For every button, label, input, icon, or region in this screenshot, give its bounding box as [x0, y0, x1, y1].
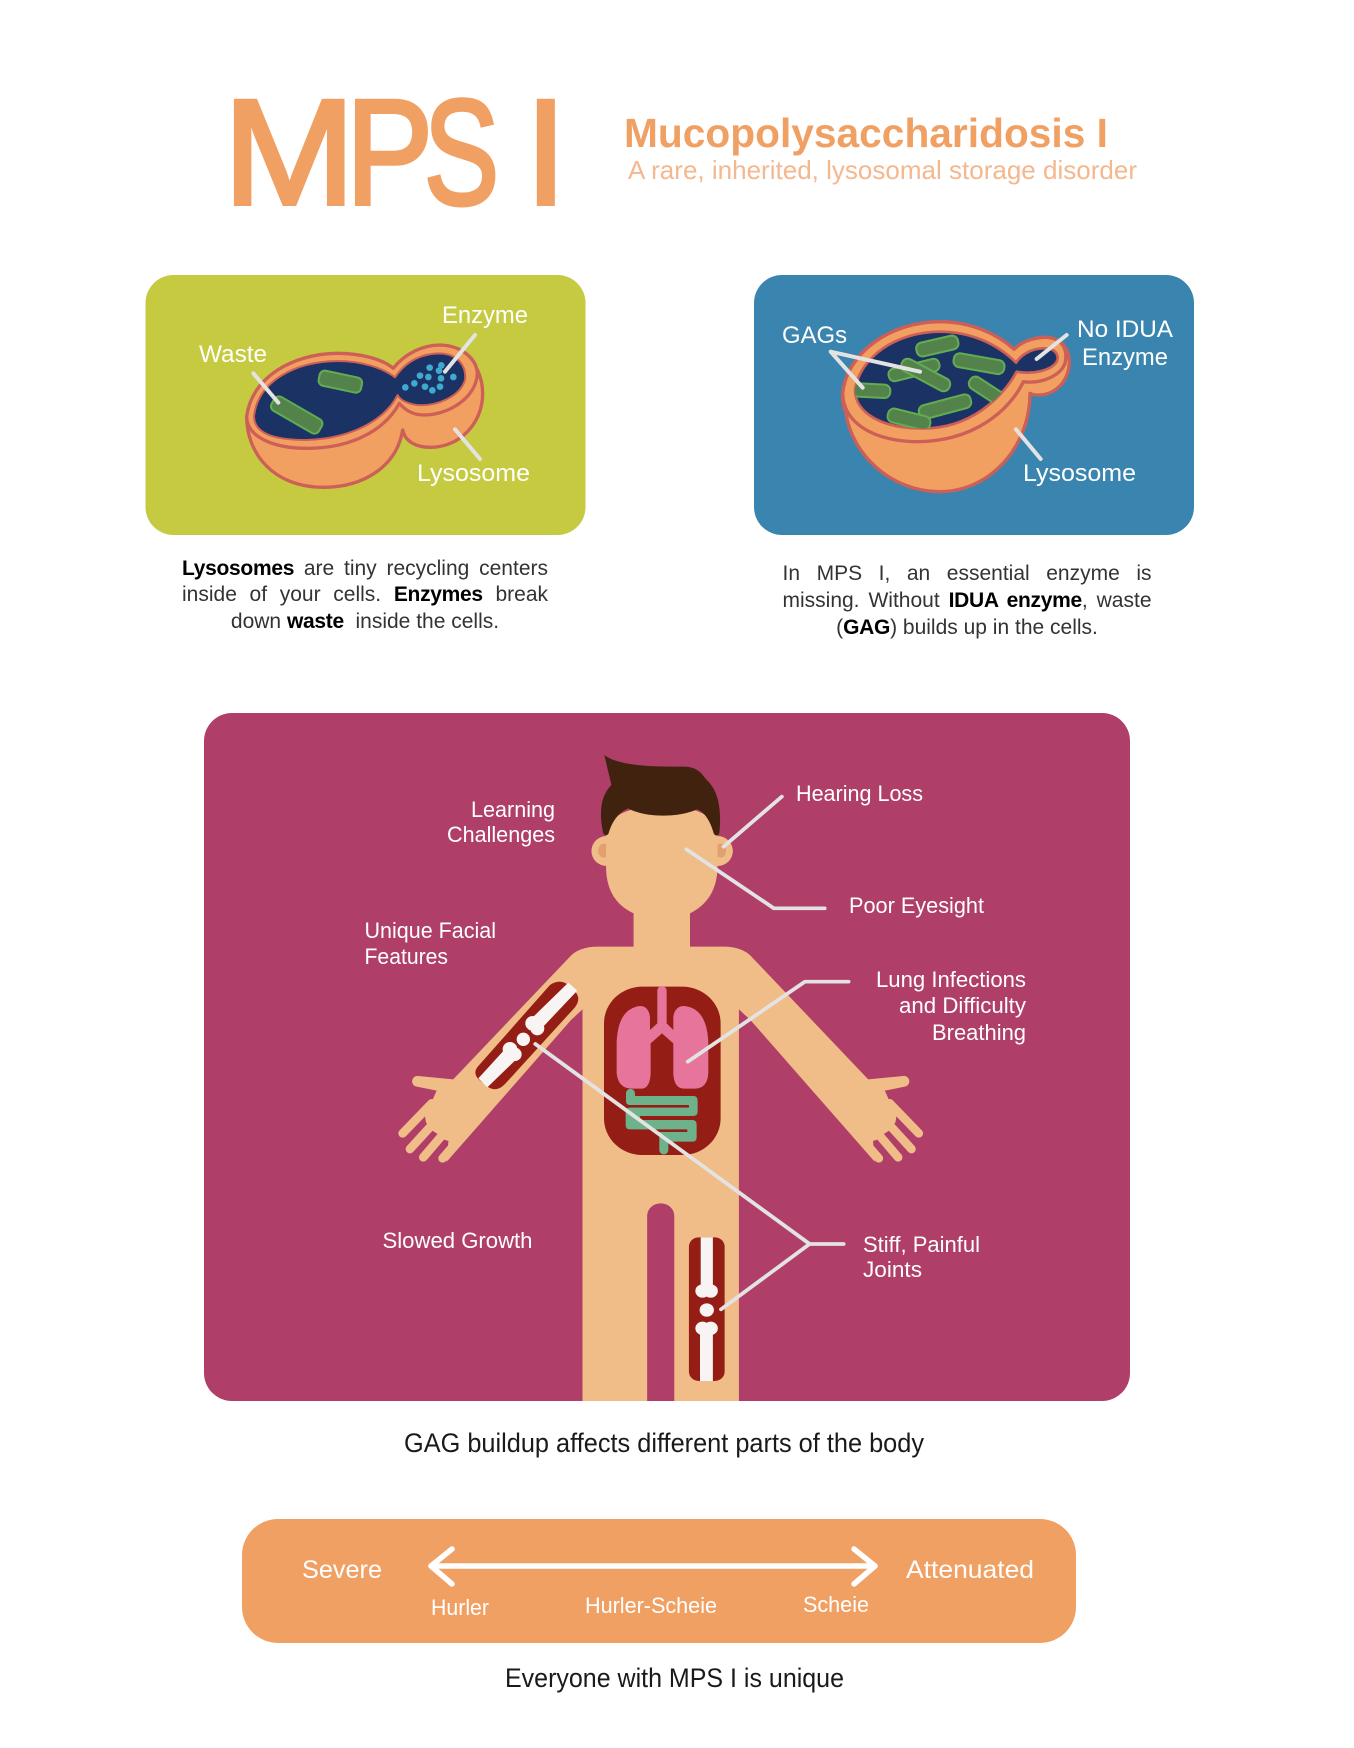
label: Unique Facial Features [364, 918, 496, 969]
label: Lung Infections and Difficulty Breathing: Breathing [932, 1020, 1026, 1045]
label: Hearing Loss: Hearing Loss [796, 781, 923, 806]
organs: chest cavity [604, 987, 721, 1155]
illustration: lysosome with enzyme [247, 335, 483, 487]
label: No IDUA Enzyme: Enzyme [1082, 344, 1168, 371]
tagline: A rare, inherited, lysosomal storage disorder [628, 155, 1137, 185]
text block: what goes wrong in MPS I: (GAG) builds up in the cells. [836, 616, 1098, 639]
title: MPS I: M [223, 68, 355, 236]
label: Hurler: Hurler [431, 1595, 489, 1620]
subtitle: full disease name: Mucopolysaccharidosis I [624, 110, 1108, 156]
panel background: magenta [204, 713, 1130, 1401]
label: Lysosome: Lysosome [1023, 460, 1136, 487]
panel: body effects [204, 713, 1130, 1401]
label: Attenuated: Attenuated [906, 1556, 1034, 1584]
label: No IDUA Enzyme: No IDUA [1077, 316, 1173, 343]
panel: MPS I lysosome [754, 275, 1194, 535]
leg: bone and joint [689, 1237, 725, 1381]
label: Lysosome: Lysosome [417, 460, 530, 487]
label: Slowed Growth: Slowed Growth [382, 1228, 532, 1253]
panel: severity spectrum [242, 1519, 1076, 1643]
illustration: human figure [403, 755, 919, 1401]
label: Scheie: Scheie [803, 1592, 869, 1617]
label: Unique Facial Features: Unique Facial [364, 918, 496, 943]
label: Lung Infections and Difficulty Breathing [876, 967, 1026, 1045]
title: MPS I: P [346, 68, 433, 236]
text block: what lysosomes do: inside of your cells. Enzymes break [182, 583, 548, 606]
label: Unique Facial Features: Features [364, 944, 448, 969]
caption: body effects: GAG buildup affects different parts of the body [404, 1428, 924, 1458]
arm: bone and joint [475, 982, 578, 1089]
panel: healthy lysosome [146, 275, 586, 535]
arrow: double headed [431, 1549, 875, 1584]
title: MPS I: S [424, 68, 499, 236]
label: Learning Challenges [447, 797, 555, 847]
illustration: lysosome full of GAGs [831, 322, 1069, 492]
label: Waste: Waste [199, 341, 267, 368]
label: Learning Challenges: Learning [471, 797, 555, 822]
label: Stiff, Painful Joints: Joints [863, 1257, 922, 1282]
panel background: orange [242, 1519, 1076, 1643]
caption: everyone is unique: Everyone with MPS I is unique [505, 1663, 844, 1693]
organs: intestines [626, 1089, 698, 1154]
label: Learning Challenges: Challenges [447, 822, 555, 847]
label: Severe: Severe [302, 1556, 382, 1584]
callout lines [535, 797, 849, 1309]
label: Stiff, Painful Joints [863, 1232, 980, 1282]
title: MPS I [223, 68, 567, 236]
text block: what lysosomes do [182, 557, 548, 633]
panel background: blue [754, 275, 1194, 535]
label: Lung Infections and Difficulty Breathing: and Difficulty [899, 993, 1026, 1018]
text block: what goes wrong in MPS I: In MPS I, an essential enzyme is [782, 562, 1152, 585]
text block: what goes wrong in MPS I: missing. Without IDUA enzyme, waste [782, 589, 1152, 612]
figure: torso, legs and arms [403, 907, 919, 1401]
organs: lungs and trachea [617, 986, 708, 1089]
label: No IDUA Enzyme [1077, 316, 1173, 371]
label: Hurler-Scheie: Hurler-Scheie [585, 1593, 717, 1618]
panel background: green [146, 275, 586, 535]
text block: what lysosomes do: Lysosomes are tiny recycling centers [182, 557, 548, 580]
organs: chest contents [604, 986, 721, 1155]
label: GAGs: GAGs [782, 322, 847, 349]
label: Stiff, Painful Joints: Stiff, Painful [863, 1232, 980, 1257]
text block: what goes wrong in MPS I [782, 562, 1152, 639]
figure: head with ears and hair [591, 755, 733, 913]
label: Poor Eyesight: Poor Eyesight [849, 893, 984, 918]
label: Enzyme: Enzyme [442, 302, 528, 329]
label: Lung Infections and Difficulty Breathing: Lung Infections [876, 967, 1026, 992]
title: MPS I: I [525, 68, 567, 236]
text block: what lysosomes do: down waste inside the cells. [231, 610, 499, 633]
